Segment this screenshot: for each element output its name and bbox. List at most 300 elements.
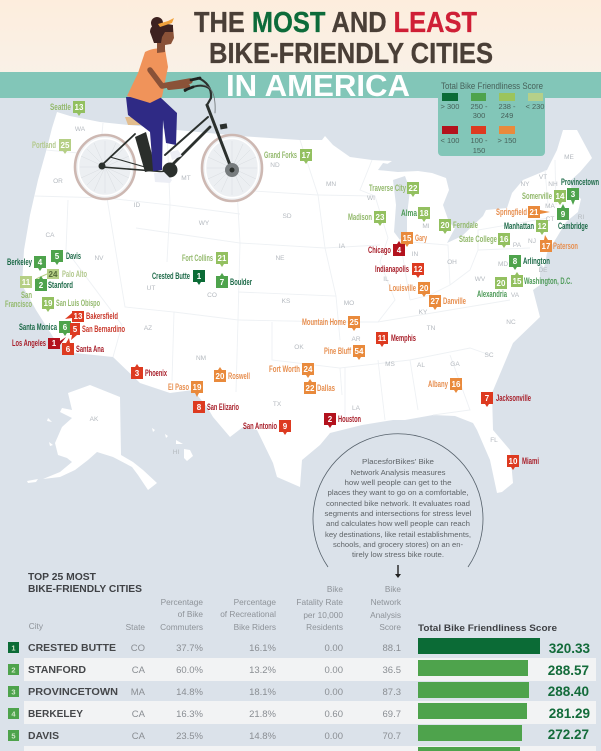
map: state abbreviations: AK <box>90 416 99 423</box>
column headers: Fatality Rate <box>296 597 343 607</box>
map: state abbreviations: UT <box>147 285 155 292</box>
pin: Stanford: Stanford <box>48 280 73 290</box>
pin: Phoenix: 3 <box>135 369 140 378</box>
row 1: 88.1 <box>382 643 401 654</box>
pin: Danville: 27 <box>431 297 440 306</box>
rider headband <box>158 18 174 27</box>
pin: Miami <box>507 455 539 470</box>
map: state abbreviations: OH <box>447 259 457 266</box>
map: state abbreviations: IL <box>383 276 389 283</box>
row 2: 288.57 <box>548 663 589 678</box>
map: state abbreviations: ND <box>270 162 280 169</box>
pin: Washington, D.C.: 15 <box>513 277 522 286</box>
pin: Traverse City: 22 <box>409 184 418 193</box>
column headers: of Recreational <box>220 609 276 619</box>
pin: State College: 16 <box>500 235 509 244</box>
pin: Palo Alto <box>36 269 87 279</box>
pin: Louisville: Louisville <box>389 283 416 293</box>
pin: Fort Worth: Fort Worth <box>269 364 300 374</box>
callout text: key destinations, like retail establishments, <box>325 532 471 539</box>
pin: Crested Butte <box>152 270 205 285</box>
row 3: 14.8% <box>176 687 204 698</box>
column headers: Bike <box>327 584 343 594</box>
map: state abbreviations: WI <box>367 195 375 202</box>
table heading: BIKE-FRIENDLY CITIES <box>28 584 142 595</box>
row 1: 0.00 <box>324 643 343 654</box>
row 2: CA <box>132 665 146 676</box>
pin: Manhattan: 12 <box>538 222 547 231</box>
column headers: Percentage <box>161 597 203 607</box>
pin: Indianapolis: 12 <box>414 265 423 274</box>
pin: San Luis Obispo: 19 <box>44 299 53 308</box>
pin: Albany: Albany <box>428 379 448 389</box>
column headers: City <box>29 621 44 631</box>
pin: Santa Monica <box>19 321 71 336</box>
map: state abbreviations: NJ <box>528 238 536 245</box>
pin: Fort Worth <box>269 363 314 378</box>
map: state abbreviations: KY <box>419 309 428 316</box>
map: state abbreviations: OK <box>294 344 304 351</box>
table: top 25 most bike-friendly cities <box>8 572 596 751</box>
pin: San Antonio: 9 <box>283 422 288 431</box>
pin: Indianapolis <box>375 263 424 278</box>
pin: Manhattan <box>504 220 548 235</box>
row 1: 37.7% <box>176 643 204 654</box>
map: state abbreviations: MI <box>422 223 430 230</box>
pin: San Francisco: 11 <box>22 278 31 287</box>
pin: Pine Bluff <box>324 345 365 360</box>
map: state abbreviations: KS <box>282 298 291 305</box>
pin: Houston: Houston <box>338 414 361 424</box>
pin: Roswell <box>214 367 250 382</box>
column headers: per 10,000 <box>303 610 343 620</box>
pin: Paterson: 17 <box>542 242 551 251</box>
callout text: how well people can get to the <box>344 480 452 487</box>
pin: Los Angeles: Los Angeles <box>12 338 46 348</box>
pin: Fort Collins <box>182 252 228 267</box>
pin: Phoenix: Phoenix <box>145 368 167 378</box>
pin: San Luis Obispo <box>42 297 100 312</box>
pin: Paterson <box>540 235 578 252</box>
pin: Arlington: 8 <box>513 257 518 266</box>
pin: Louisville: 20 <box>420 284 429 293</box>
row 5: CA <box>132 731 146 742</box>
pin: Springfield: 21 <box>530 208 539 217</box>
pin: Houston: 2 <box>328 415 333 424</box>
pin: Memphis: Memphis <box>391 333 416 343</box>
map: state abbreviations: SD <box>282 213 292 220</box>
map: state abbreviations: MS <box>385 361 396 368</box>
callout text: connected bike network. It evaluates road <box>326 501 470 508</box>
row 4: 16.3% <box>176 709 204 720</box>
map: state abbreviations: IN <box>412 251 419 258</box>
pin: Seattle: 13 <box>75 103 84 112</box>
legend labels: high scores: 300 <box>473 111 485 120</box>
pin: San Elizario <box>193 401 239 413</box>
row 3: PROVINCETOWN <box>28 686 118 698</box>
pin: Madison: Madison <box>348 212 372 222</box>
pin: Grand Forks: 17 <box>302 151 311 160</box>
row 1: 320.33 <box>549 641 590 656</box>
pin: Traverse City <box>369 182 419 197</box>
pin: Davis: 5 <box>55 252 60 261</box>
pin: State College <box>459 233 510 248</box>
row 2 <box>8 660 589 678</box>
pin: Boulder: Boulder <box>230 277 252 287</box>
legend title: Total Bike Friendliness Score <box>441 81 543 91</box>
map: state abbreviations: LA <box>352 405 361 412</box>
pin: Somerville: 14 <box>556 192 565 201</box>
pin: San Antonio <box>243 420 291 435</box>
row 3: 18.1% <box>249 687 277 698</box>
pin: San Francisco <box>5 276 32 309</box>
row 2: 2 <box>11 666 16 674</box>
column headers: Commuters <box>160 622 203 632</box>
pin: Santa Ana: 6 <box>66 345 71 354</box>
rider shirt <box>127 48 168 103</box>
map: state abbreviations: AL <box>417 362 425 369</box>
pin: Phoenix <box>131 364 167 379</box>
row 5 <box>8 725 589 742</box>
pin: Paterson: Paterson <box>553 241 578 251</box>
row 1: CO <box>131 643 145 654</box>
pin: Chicago: 4 <box>397 246 402 255</box>
callout circle <box>313 434 483 567</box>
teal title band <box>0 72 601 98</box>
map: state abbreviations: NC <box>506 319 516 326</box>
pin: Somerville: Somerville <box>522 191 552 201</box>
pin: Portland <box>32 139 71 154</box>
pin: Arlington: Arlington <box>523 256 550 266</box>
map: state abbreviations: NV <box>94 255 104 262</box>
pin: San Francisco: San <box>21 290 32 300</box>
legend labels: low scores <box>441 136 516 155</box>
pin: Arlington <box>509 255 550 270</box>
seat <box>125 117 141 125</box>
map: state abbreviations: RI <box>578 214 584 221</box>
pin: Stanford <box>35 276 73 291</box>
pin: Cambridge <box>557 204 588 231</box>
callout: bike network analysis explanation <box>313 434 483 578</box>
pin: Alma <box>401 207 430 222</box>
pin: Santa Ana: Santa Ana <box>76 344 105 354</box>
pin: Alexandria <box>477 277 508 299</box>
callout text: places they want to go on a comfortable, <box>328 490 469 497</box>
pin: Provincetown: 3 <box>571 190 576 199</box>
pin: Grand Forks <box>264 149 312 164</box>
pin: Memphis: 11 <box>378 334 387 343</box>
battery <box>135 132 156 172</box>
pin: Bakersfield <box>65 311 118 322</box>
row 5: 23.5% <box>176 731 204 742</box>
legend labels: high scores: < 230 <box>526 102 544 111</box>
column headers: Network <box>371 597 402 607</box>
pin: Mountain Home <box>302 316 360 331</box>
pin: El Paso: El Paso <box>168 382 189 392</box>
hubs and crank <box>98 123 239 178</box>
pin: Fort Worth: 24 <box>304 365 313 374</box>
callout text: schools, and grocery stores) on an en- <box>333 542 464 549</box>
header background <box>0 0 601 73</box>
pin: Jacksonville: Jacksonville <box>496 393 531 403</box>
pin: Albany: 16 <box>452 380 461 389</box>
row bands <box>24 658 596 751</box>
title line 1: THE MOST AND LEAST <box>194 7 477 39</box>
pin: Palo Alto: 24 <box>49 270 58 279</box>
map: state abbreviations: NM <box>196 355 206 362</box>
map: state abbreviations: AZ <box>144 325 152 332</box>
pin: Portland: 25 <box>61 141 70 150</box>
map: state abbreviations: ID <box>134 202 141 209</box>
row 1: 1 <box>11 644 16 652</box>
rider arms <box>150 70 190 88</box>
row 5: 5 <box>11 732 16 740</box>
row 4 <box>8 703 590 721</box>
row 3: MA <box>131 687 146 698</box>
row 1: CRESTED BUTTE <box>28 642 116 654</box>
pin: Santa Monica: Santa Monica <box>19 322 58 332</box>
pin: Chicago: Chicago <box>368 245 391 255</box>
map: contiguous states <box>22 112 592 493</box>
legend labels: low scores: > 150 <box>498 136 516 145</box>
rear wheel <box>75 135 135 199</box>
column headers: Bike Riders <box>234 622 276 632</box>
row 6 bar <box>418 747 520 751</box>
legend labels: high scores: > 300 <box>441 102 459 111</box>
row 1 <box>8 638 590 656</box>
row 4: 281.29 <box>549 706 590 721</box>
pin: Washington, D.C. <box>511 272 572 287</box>
pin: Somerville <box>522 190 566 205</box>
pin: San Elizario: San Elizario <box>207 402 239 412</box>
pin: Madison <box>348 211 386 226</box>
column headers: Score <box>379 622 401 632</box>
title line 2: BIKE-FRIENDLY CITIES <box>209 38 493 70</box>
map: state abbreviations: NH <box>548 181 558 188</box>
pin: Boulder <box>216 273 252 288</box>
rider neck and head <box>157 27 174 53</box>
pin: Boulder: 7 <box>220 278 225 287</box>
pin: Dallas <box>304 379 335 394</box>
pin: Alma: Alma <box>401 208 418 218</box>
map: state abbreviations: AR <box>351 336 361 343</box>
pin: Fort Collins: Fort Collins <box>182 253 213 263</box>
map: state abbreviations: PA <box>513 242 522 249</box>
pin: Berkeley: 4 <box>38 258 43 267</box>
rider legs <box>126 97 177 171</box>
table heading <box>28 572 142 595</box>
map: state abbreviations: WY <box>199 220 210 227</box>
legend labels: high scores: 250 - <box>470 102 488 111</box>
pin: Albany <box>428 378 462 393</box>
chart heading: Total Bike Friendliness Score <box>418 623 557 634</box>
row 1: 16.1% <box>249 643 277 654</box>
map: state abbreviations: OR <box>53 178 63 185</box>
table heading: TOP 25 MOST <box>28 572 96 583</box>
pin: Pine Bluff: 54 <box>355 347 364 356</box>
column headers: Analysis <box>370 610 401 620</box>
pin: Palo Alto: Palo Alto <box>62 269 87 279</box>
pin: Jacksonville <box>481 392 531 407</box>
row 5: DAVIS <box>28 730 59 742</box>
map: alaska <box>43 385 157 490</box>
pin: San Antonio: San Antonio <box>243 421 277 431</box>
map: state abbreviations: FL <box>490 437 498 444</box>
bike frame <box>102 78 230 172</box>
pin: Roswell: Roswell <box>228 371 250 381</box>
pin: Springfield: Springfield <box>496 207 527 217</box>
map: state abbreviations: CT <box>546 216 554 223</box>
pin: Gary: Gary <box>415 233 427 243</box>
map: state abbreviations: VT <box>539 174 547 181</box>
pin: Miami: Miami <box>522 456 539 466</box>
pin: San Luis Obispo: San Luis Obispo <box>56 298 100 308</box>
front wheel <box>202 135 262 201</box>
row 2: 36.5 <box>382 665 401 676</box>
row 3: 3 <box>11 688 16 696</box>
pin: Danville <box>429 295 466 310</box>
map of the United States <box>22 112 592 493</box>
map: state abbreviations: GA <box>450 361 460 368</box>
pin: Jacksonville: 7 <box>485 394 490 403</box>
rider shoes <box>154 150 182 183</box>
pin: Berkeley: Berkeley <box>7 257 32 267</box>
row 4: 69.7 <box>382 709 401 720</box>
map: state abbreviations: SC <box>484 352 494 359</box>
map: state abbreviations: NY <box>520 181 530 188</box>
pin: Gary <box>401 232 427 247</box>
map: state abbreviations: WA <box>75 126 86 133</box>
map: state abbreviations <box>45 126 584 456</box>
pin: Seattle: Seattle <box>50 102 71 112</box>
pin: Cambridge: 9 <box>561 210 566 219</box>
callout text: PlacesforBikes' Bike <box>362 459 434 466</box>
pin: Manhattan: Manhattan <box>504 221 534 231</box>
pin: State College: State College <box>459 234 497 244</box>
row 5: 272.27 <box>548 727 589 742</box>
legend labels: high scores: 238 - <box>498 102 516 111</box>
row 4: CA <box>132 709 146 720</box>
map: state abbreviations: NE <box>275 255 285 262</box>
row 2: 0.00 <box>324 665 343 676</box>
column headers: State <box>126 622 145 632</box>
legend swatches: high scores <box>442 93 543 101</box>
pin: Gary: 15 <box>403 234 412 243</box>
pin: Davis: Davis <box>66 251 81 261</box>
pin: Louisville <box>389 282 430 297</box>
legend labels: low scores: 100 - <box>470 136 488 145</box>
pin: Miami: 10 <box>509 457 518 466</box>
map: state abbreviations: DE <box>538 267 548 274</box>
title <box>194 7 493 103</box>
map: state abbreviations: MO <box>344 300 354 307</box>
row 4: 21.8% <box>249 709 277 720</box>
callout text: Network Analysis measures <box>350 470 446 477</box>
map: state abbreviations: HI <box>173 449 179 456</box>
row 5: 14.8% <box>249 731 277 742</box>
pin: San Elizario: 8 <box>197 403 202 412</box>
pin: Fort Collins: 21 <box>218 254 227 263</box>
row 2: 13.2% <box>249 665 277 676</box>
column headers: of Bike <box>178 609 203 619</box>
pin: Alexandria: 20 <box>497 279 506 288</box>
pin: Roswell: 20 <box>216 372 225 381</box>
callout text: and calculates how well people can reach <box>326 521 470 528</box>
legend labels: low scores: < 100 <box>441 136 459 145</box>
pin: Grand Forks: Grand Forks <box>264 150 297 160</box>
pin: Santa Monica: 6 <box>63 323 68 332</box>
legend swatches: low scores <box>442 126 515 134</box>
pin: Danville: Danville <box>443 296 466 306</box>
pin: Crested Butte: Crested Butte <box>152 271 190 281</box>
map: state abbreviations: MA <box>545 203 556 210</box>
pin: Mountain Home: Mountain Home <box>302 317 346 327</box>
rider hair <box>150 17 173 43</box>
row 3: 87.3 <box>382 687 401 698</box>
map: state abbreviations: TX <box>273 401 282 408</box>
pin: Chicago <box>368 241 405 256</box>
pin: Ferndale: 20 <box>441 221 450 230</box>
map: state abbreviations: TN <box>427 325 436 332</box>
pin: Pine Bluff: Pine Bluff <box>324 346 352 356</box>
column headers: Bike <box>385 584 401 594</box>
map: state abbreviations: IA <box>339 243 346 250</box>
map: state abbreviations: CA <box>45 232 55 239</box>
row 2: 60.0% <box>176 665 204 676</box>
pin: Seattle <box>50 101 85 116</box>
map: great lakes <box>393 176 410 240</box>
legend labels: high scores: 249 <box>501 111 513 120</box>
map: state abbreviations: VA <box>511 292 520 299</box>
pin: Traverse City: Traverse City <box>369 183 406 193</box>
legend panel <box>438 72 545 156</box>
pin: Dallas: 22 <box>306 384 315 393</box>
row 4: 4 <box>11 710 16 718</box>
grips <box>185 78 200 90</box>
pin: Alma: 18 <box>420 209 429 218</box>
row 3: 288.40 <box>548 684 589 699</box>
title line 3: IN AMERICA <box>226 68 410 103</box>
pin: Santa Ana <box>62 338 105 355</box>
pin: Bakersfield: Bakersfield <box>86 311 118 321</box>
map: state abbreviations: WV <box>475 276 486 283</box>
pin: Bakersfield: 13 <box>74 312 83 321</box>
column headers: Percentage <box>234 597 276 607</box>
pin: San Bernardino <box>70 323 125 340</box>
pin: Berkeley <box>7 256 46 271</box>
callout text <box>324 459 472 559</box>
legend labels: low scores: 150 <box>473 146 485 155</box>
row 2: STANFORD <box>28 664 86 676</box>
pin: El Paso <box>168 381 203 397</box>
pin: Los Angeles: 1 <box>52 339 57 348</box>
row 5: 0.00 <box>324 731 343 742</box>
pin: Ferndale: Ferndale <box>453 220 478 230</box>
row 5: 70.7 <box>382 731 401 742</box>
pin: Davis <box>51 250 81 265</box>
pin: El Paso: 19 <box>193 383 202 392</box>
pin: San Bernardino: 5 <box>73 325 78 334</box>
pin: Memphis <box>376 332 416 347</box>
pin: Ferndale <box>439 219 478 234</box>
pin: Indianapolis: Indianapolis <box>375 264 409 274</box>
callout text: segments and intersections for stress level <box>324 511 472 518</box>
pin: San Francisco: Francisco <box>5 299 32 309</box>
pin: Provincetown <box>561 177 599 205</box>
map: hawaii <box>152 428 193 461</box>
map: state abbreviations: ME <box>564 154 575 161</box>
pin: Houston <box>324 413 361 428</box>
